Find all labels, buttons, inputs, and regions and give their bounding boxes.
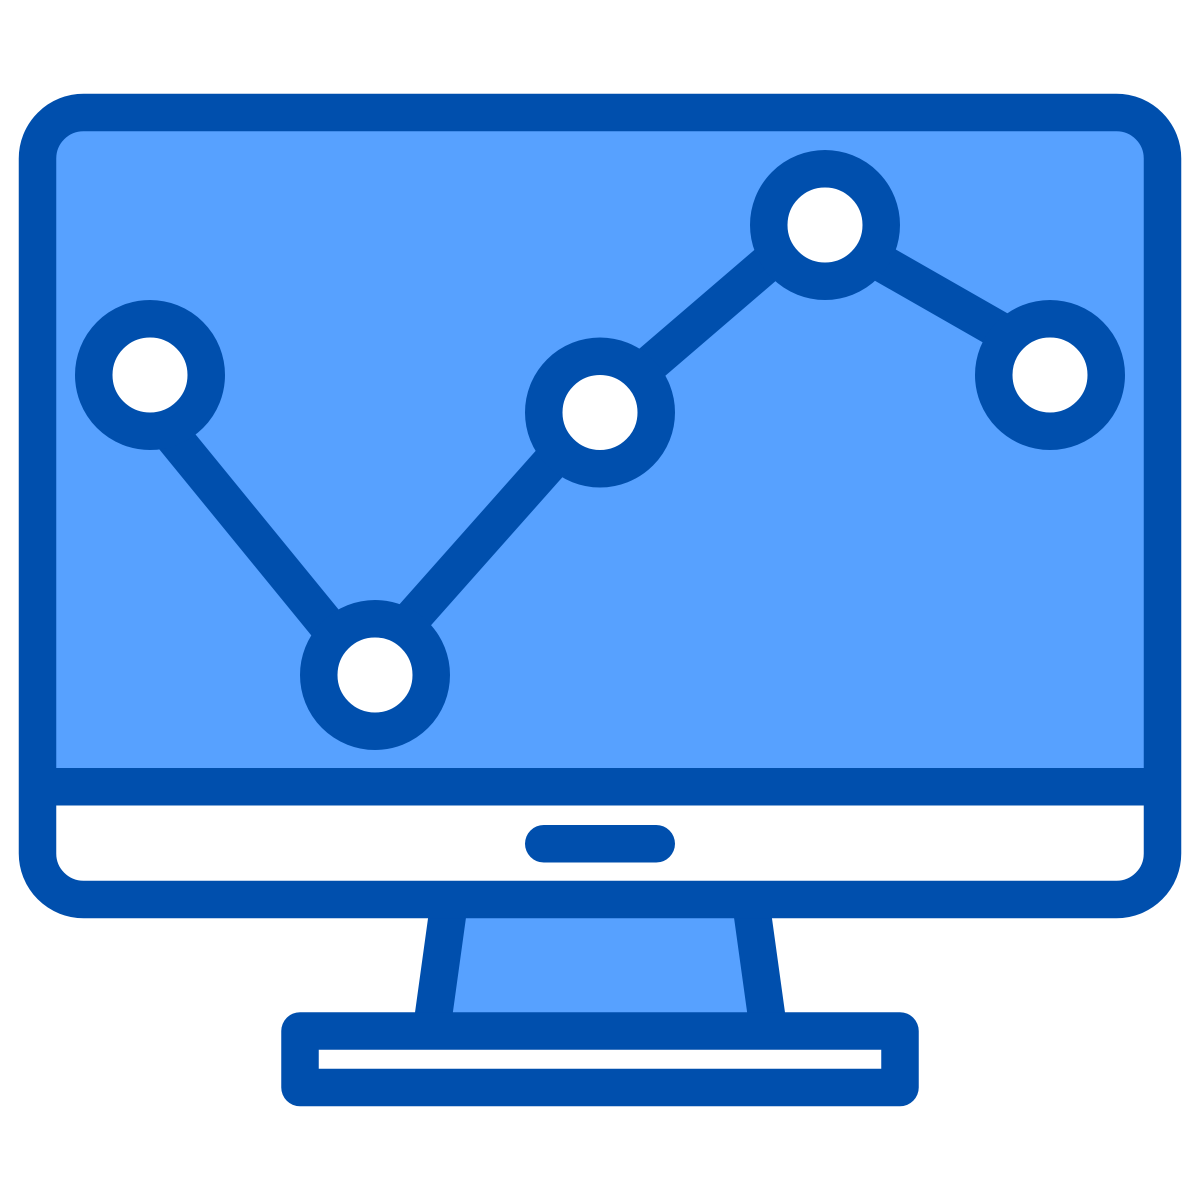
data point 4 [769, 169, 881, 281]
chart line [162, 249, 1016, 641]
power button [525, 825, 675, 862]
bottom bezel [37, 787, 1163, 900]
monitor stand base [300, 1031, 900, 1088]
data point 5 [994, 319, 1106, 431]
line chart [94, 169, 1106, 731]
screen [38, 112, 1162, 787]
bezel divider [38, 768, 1162, 806]
data point 1 [94, 319, 206, 431]
data point 3 [544, 356, 656, 469]
monitor body [37, 112, 1163, 900]
monitor stand neck [432, 900, 768, 1030]
monitor outline [38, 112, 1162, 900]
data point 2 [319, 619, 431, 731]
